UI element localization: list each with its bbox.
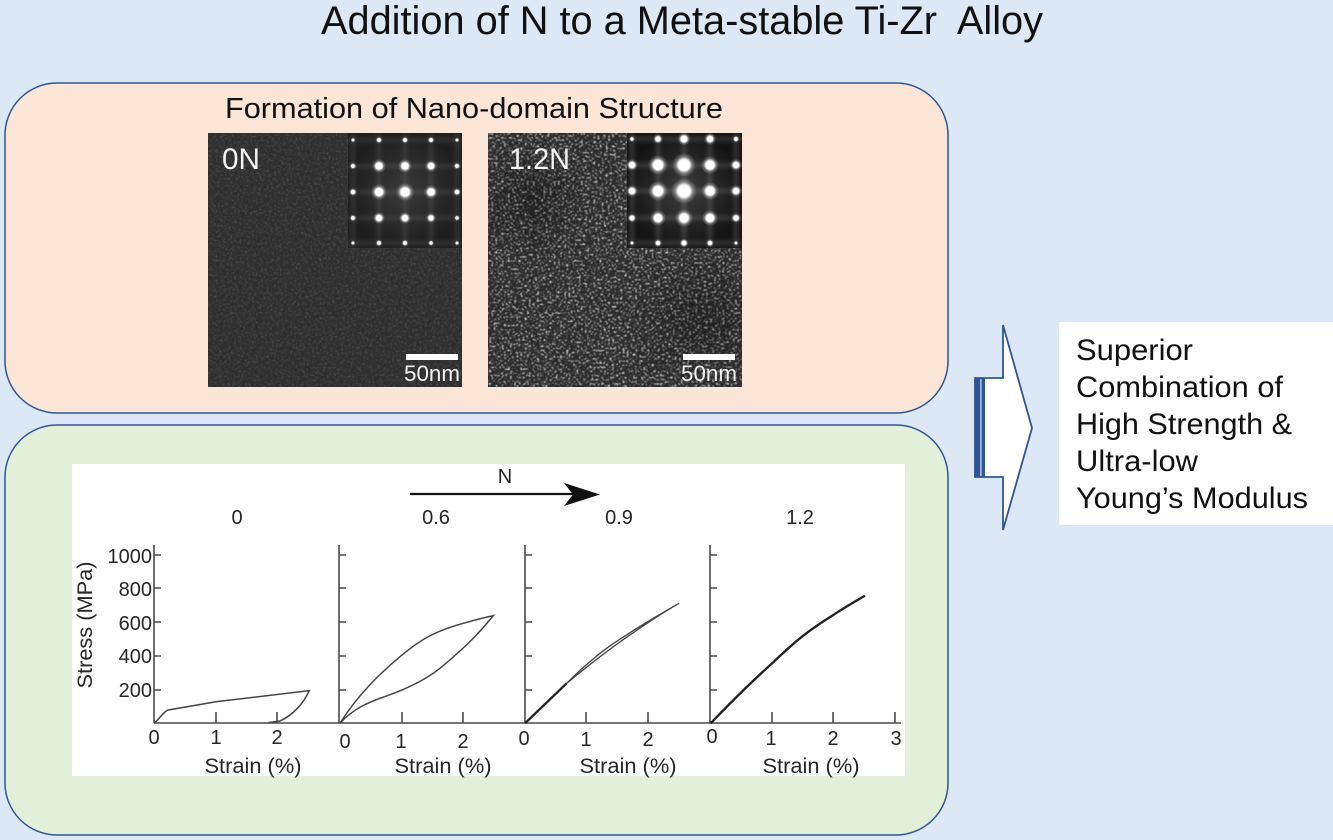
chart: 1.2 N: Strain (%) [762,755,860,778]
chart: 0 N [148,507,309,778]
chart: 0.9 N: 2 [642,729,654,751]
diffraction inset 1.2N [626,132,742,248]
chart: 0.6 N: 1 [395,731,407,753]
arrow: result [975,325,1032,530]
callout: result [1059,322,1333,525]
panel: nano-domain structure [5,83,948,413]
y axis labels: 800 [119,579,152,601]
chart: 0.9 N [518,507,679,778]
chart: 0.6 N: Strain (%) [394,755,492,778]
chart: 0 N: 0 [231,507,243,529]
chart: 0.9 N: Strain (%) [580,755,676,778]
chart: 0.6 N: 0.6 [422,507,450,529]
chart: 1.2 N: 0 [706,726,718,748]
y axis labels: 400 [119,646,152,668]
chart background [72,464,905,776]
panel heading: Formation of Nano-domain Structure [225,93,723,125]
chart: 0 N: 2 [271,727,283,749]
micrograph: 1.2N [488,133,742,387]
chart: 0.9 N: 0 [518,728,530,750]
chart: 1.2 N: 2 [827,728,839,750]
arrow: increasing N [410,466,600,506]
chart: 0.6 N [339,507,493,778]
chart: 1.2 N [706,507,902,778]
chart: 0.6 N: 2 [457,731,469,753]
sample label 1.2N: 1.2N [509,143,570,176]
chart: 1.2 N: 1 [765,728,777,750]
y axis labels: 1000 [108,546,152,568]
sample label 0N: 0N [222,143,260,176]
chart: 0.9 N: 1 [580,729,592,751]
y axis labels: 600 [119,613,152,635]
panel: stress-strain curves [5,425,948,835]
callout: result: Combination of [1076,371,1284,404]
chart: 0 N: Strain (%) [204,755,302,778]
chart: 0.9 N: 0.9 [605,507,633,529]
panel background: peach [5,83,948,413]
title: Addition of N to a Meta-stable Ti-Zr Alloy [321,0,1043,43]
scale bar 1.2N: 50nm [681,361,737,386]
chart: 0 N: 0 [148,727,160,749]
y axis title: Stress (MPa) [74,562,97,688]
chart: 1.2 N: 1.2 [786,507,814,529]
arrow: increasing N: N [498,466,512,488]
callout: result: Young’s Modulus [1076,482,1308,515]
chart: 0 N: 1 [210,727,222,749]
callout: result: Superior [1076,334,1193,367]
diffraction inset 0N [348,133,462,248]
scale bar 0N: 50nm [404,361,460,386]
shared strain baseline [154,722,901,724]
chart: 0.6 N: 0 [339,731,351,753]
chart: 1.2 N: 3 [890,728,902,750]
panel background: green [5,425,948,835]
callout: result: High Strength & [1076,408,1292,441]
callout: result: Ultra-low [1076,445,1198,478]
y axis labels [108,546,152,702]
y axis labels: 200 [119,680,152,702]
micrograph: 0N [208,133,462,387]
